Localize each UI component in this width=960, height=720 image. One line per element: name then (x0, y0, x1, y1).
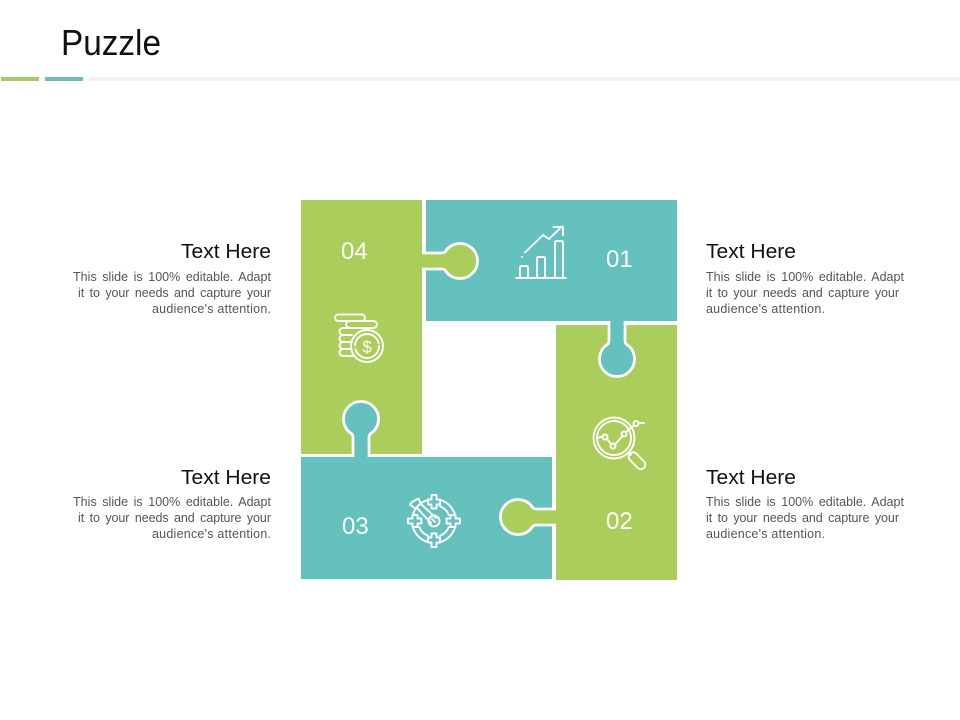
text block: top right: audience's attention. (706, 302, 825, 316)
piece 03 (301, 457, 552, 579)
knob: piece 04 into piece 01 (421, 244, 478, 278)
piece 02 (556, 325, 677, 580)
text block: bottom left: audience's attention. (152, 527, 271, 541)
icon: coins with dollar (335, 314, 383, 362)
number 02: 02 (606, 508, 633, 535)
header rule (1, 77, 960, 81)
piece 01 (426, 200, 677, 321)
text block: top right: This slide is 100% editable. Adapt (706, 270, 905, 284)
title: Puzzle (61, 22, 161, 63)
dollar sign: $ (362, 338, 372, 356)
text block: bottom right (706, 466, 905, 541)
knob: piece 01 into piece 02 (600, 320, 634, 377)
text block: top left: Text Here (181, 240, 271, 263)
piece 04 (301, 200, 422, 454)
text block: bottom right: it to your needs and capture your (706, 511, 899, 525)
number 04: 04 (341, 238, 368, 265)
text block: bottom left: This slide is 100% editable. Adapt (73, 495, 272, 509)
knob: piece 02 into piece 03 (500, 500, 557, 534)
text block: top left: audience's attention. (152, 302, 271, 316)
text block: bottom left: it to your needs and capture your (78, 511, 271, 525)
text block: bottom right: audience's attention. (706, 527, 825, 541)
text block: bottom right: This slide is 100% editable. Adapt (706, 495, 905, 509)
text block: top left (73, 240, 272, 316)
number 01: 01 (606, 246, 633, 273)
text block: top left: This slide is 100% editable. Adapt (73, 270, 272, 284)
number 03: 03 (342, 513, 369, 540)
text block: bottom right: Text Here (706, 466, 796, 489)
icon: target with arrow (408, 495, 460, 547)
puzzle diagram (301, 200, 677, 580)
text block: top right (706, 240, 905, 316)
text block: bottom left (73, 466, 272, 541)
knob: piece 03 into piece 04 (344, 401, 378, 458)
text block: top right: Text Here (706, 240, 796, 263)
text block: top left: it to your needs and capture your (78, 286, 271, 300)
text block: bottom left: Text Here (181, 466, 271, 489)
text block: top right: it to your needs and capture your (706, 286, 899, 300)
icon: bar chart with arrow (516, 226, 566, 278)
icon: magnifier with line chart (594, 418, 647, 471)
